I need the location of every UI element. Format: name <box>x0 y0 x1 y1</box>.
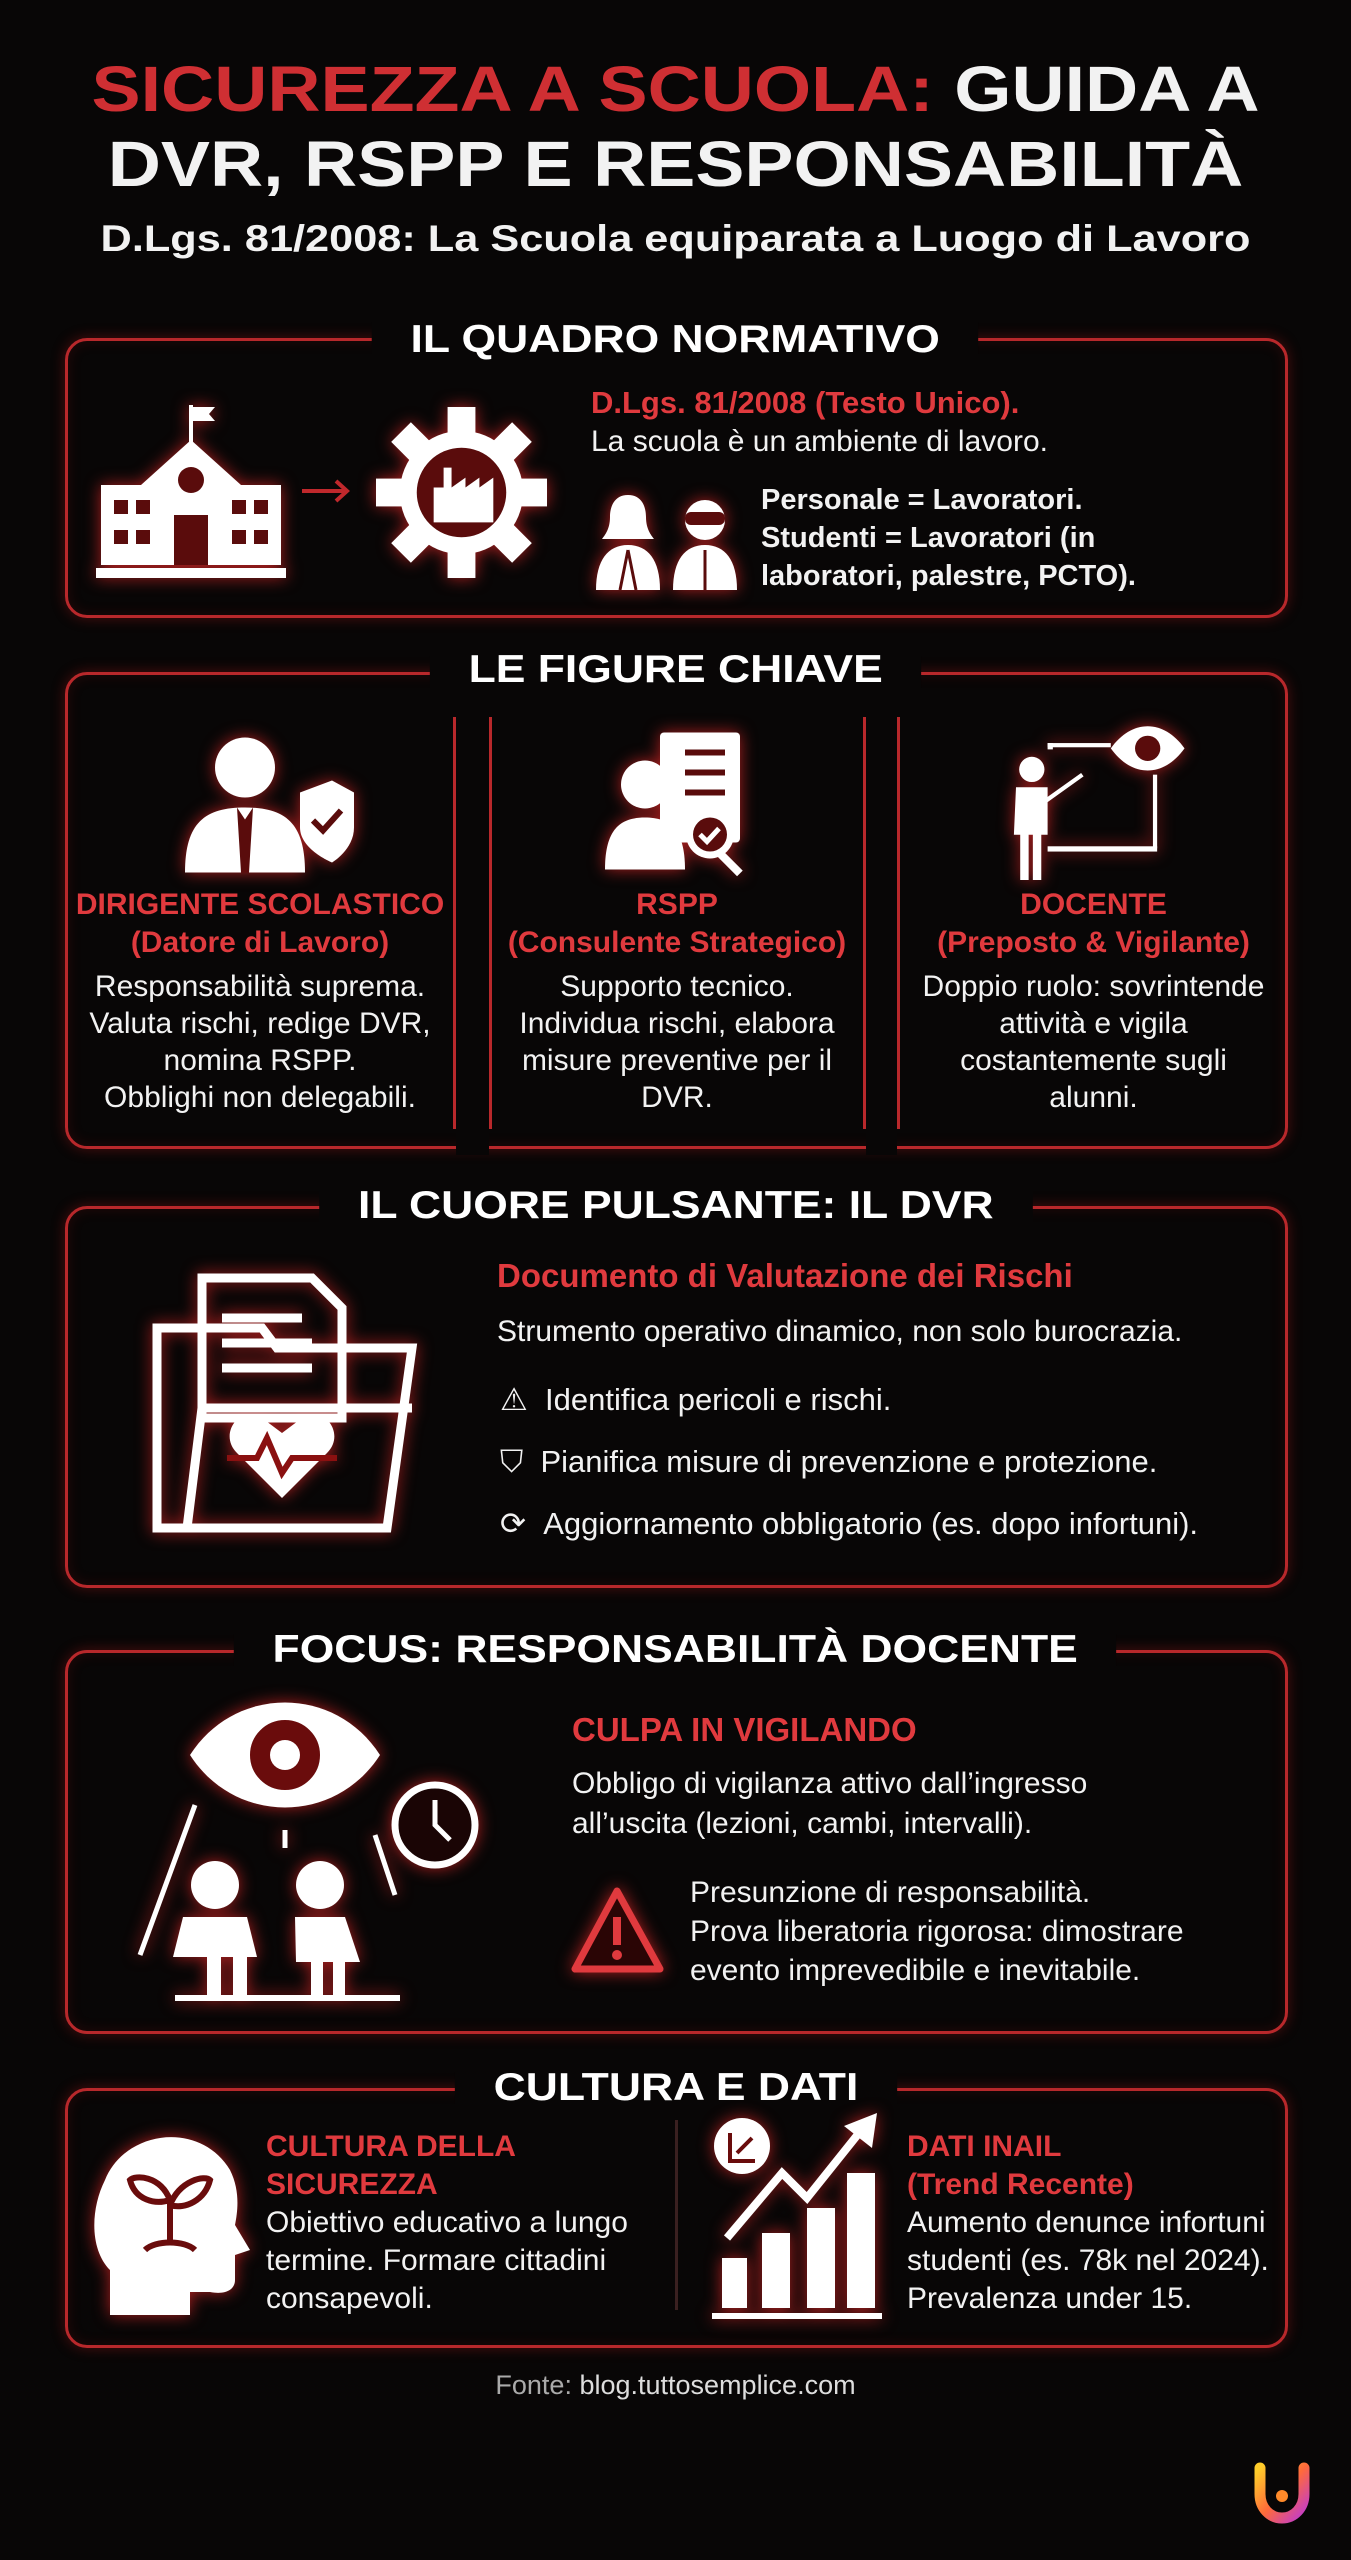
text: cultura della sicurezza: consapevoli. <box>266 2282 433 2315</box>
text: presunzione: Presunzione di responsabilità. <box>690 1876 1090 1909</box>
icon: rspp <box>594 720 752 883</box>
text: Obbligo di vigilanza attivo dall’ingresso <box>572 1767 1087 1800</box>
list: dvr items: ⛉ Pianifica misure di prevenzione e protezione. <box>500 1444 1157 1479</box>
text: cultura della sicurezza: Obiettivo educativo a lungo <box>266 2206 628 2239</box>
text: docente <box>923 888 1264 1114</box>
panel: responsabilita docente <box>65 1650 1288 2034</box>
icon: warning <box>562 1880 672 1984</box>
heading: il cuore pulsante: IL CUORE PULSANTE: IL DVR <box>358 1184 993 1227</box>
text: dvr: Documento di Valutazione dei Rischi <box>497 1257 1073 1294</box>
panel: cultura e dati <box>65 2088 1288 2348</box>
text: docente: DOCENTE <box>1020 888 1167 921</box>
text: dirigente: (Datore di Lavoro) <box>131 926 389 959</box>
heading: le figure chiave: LE FIGURE CHIAVE <box>468 648 883 691</box>
text: lavoratori: laboratori, palestre, PCTO). <box>761 560 1136 592</box>
icon: dirigente <box>174 726 366 884</box>
list: dvr items: ⟳ Aggiornamento obbligatorio (es. dopo infortuni). <box>500 1506 1198 1541</box>
text: rspp: DVR. <box>641 1081 713 1114</box>
text: dirigente: nomina RSPP. <box>164 1044 356 1077</box>
panel: figure chiave <box>65 672 1288 1149</box>
text: docente: Doppio ruolo: sovrintende <box>923 970 1264 1003</box>
icon: workers <box>585 484 748 602</box>
list: dvr items <box>500 1382 1198 1541</box>
text: testo unico: La scuola è un ambiente di lavoro. <box>591 425 1048 458</box>
text: rspp: misure preventive per il <box>522 1044 832 1077</box>
icon: head plant <box>82 2126 258 2327</box>
title: DVR, RSPP E RESPONSABILITÀ <box>108 128 1243 200</box>
text: dirigente: Obblighi non delegabili. <box>104 1081 416 1114</box>
text: dirigente: Responsabilità suprema. <box>95 970 425 1003</box>
title <box>91 53 1260 200</box>
icon: chart <box>703 2105 889 2331</box>
text: rspp <box>508 888 846 1114</box>
text: lavoratori <box>761 484 1136 592</box>
text: dati inail: DATI INAIL <box>907 2130 1061 2163</box>
panel: dvr <box>65 1206 1288 1588</box>
text: presunzione <box>690 1876 1184 1987</box>
column dividers <box>453 717 456 1129</box>
text: dirigente: Valuta rischi, redige DVR, <box>89 1007 431 1040</box>
list: dvr items: ⚠︎ Identifica pericoli e rischi. <box>500 1382 891 1417</box>
icon: folder heart <box>140 1262 428 1544</box>
text: culpa in vigilando: CULPA IN VIGILANDO <box>572 1711 917 1748</box>
icon: school <box>86 395 296 590</box>
text: Strumento operativo dinamico, non solo burocrazia. <box>497 1315 1182 1348</box>
source: Fonte: blog.tuttosemplice.com <box>495 2370 856 2400</box>
text: cultura della sicurezza: CULTURA DELLA <box>266 2130 516 2163</box>
text: dati inail: (Trend Recente) <box>907 2168 1134 2201</box>
text: testo unico: D.Lgs. 81/2008 (Testo Unico). <box>591 385 1019 420</box>
icon: docente <box>1002 715 1193 890</box>
text: cultura della sicurezza: termine. Formare cittadini <box>266 2244 606 2277</box>
text: rspp: RSPP <box>636 888 718 921</box>
text: docente: attività e vigila <box>999 1007 1188 1040</box>
title: SICUREZZA A SCUOLA: GUIDA A <box>91 53 1260 125</box>
text: docente: (Preposto & Vigilante) <box>937 926 1250 959</box>
text: dirigente: DIRIGENTE SCOLASTICO <box>76 888 444 921</box>
text: cultura della sicurezza: SICUREZZA <box>266 2168 438 2201</box>
icon: gear factory <box>364 395 559 590</box>
text: rspp: (Consulente Strategico) <box>508 926 846 959</box>
text: dati inail: Aumento denunce infortuni <box>907 2206 1266 2239</box>
text: dirigente <box>76 888 444 1114</box>
text: dati inail: studenti (es. 78k nel 2024). <box>907 2244 1269 2277</box>
text: all’uscita (lezioni, cambi, intervalli). <box>572 1807 1032 1840</box>
text: rspp: Individua rischi, elabora <box>519 1007 835 1040</box>
text: docente: costantemente sugli <box>960 1044 1227 1077</box>
heading: cultura e dati: CULTURA E DATI <box>493 2066 858 2109</box>
heading: focus: FOCUS: RESPONSABILITÀ DOCENTE <box>273 1628 1078 1671</box>
text: docente: alunni. <box>1049 1081 1138 1114</box>
text: lavoratori: Studenti = Lavoratori (in <box>761 522 1095 554</box>
arrow <box>302 480 350 502</box>
text: presunzione: Prova liberatoria rigorosa: dimostrare <box>690 1915 1184 1948</box>
logo <box>1254 2462 1310 2524</box>
panel: quadro normativo <box>65 338 1288 618</box>
icon: eye children clock <box>130 1690 490 2013</box>
heading: il quadro normativo: IL QUADRO NORMATIVO <box>411 318 940 361</box>
text: presunzione: evento imprevedibile e inevitabile. <box>690 1954 1140 1987</box>
text: testo unico <box>591 385 1048 458</box>
text: cultura della sicurezza <box>266 2130 628 2315</box>
text: dati inail: Prevalenza under 15. <box>907 2282 1192 2315</box>
text: dati inail <box>907 2130 1269 2315</box>
text: rspp: Supporto tecnico. <box>560 970 794 1003</box>
subtitle: D.Lgs. 81/2008: La Scuola equiparata a Luogo di Lavoro <box>101 218 1250 259</box>
text: lavoratori: Personale = Lavoratori. <box>761 484 1083 516</box>
